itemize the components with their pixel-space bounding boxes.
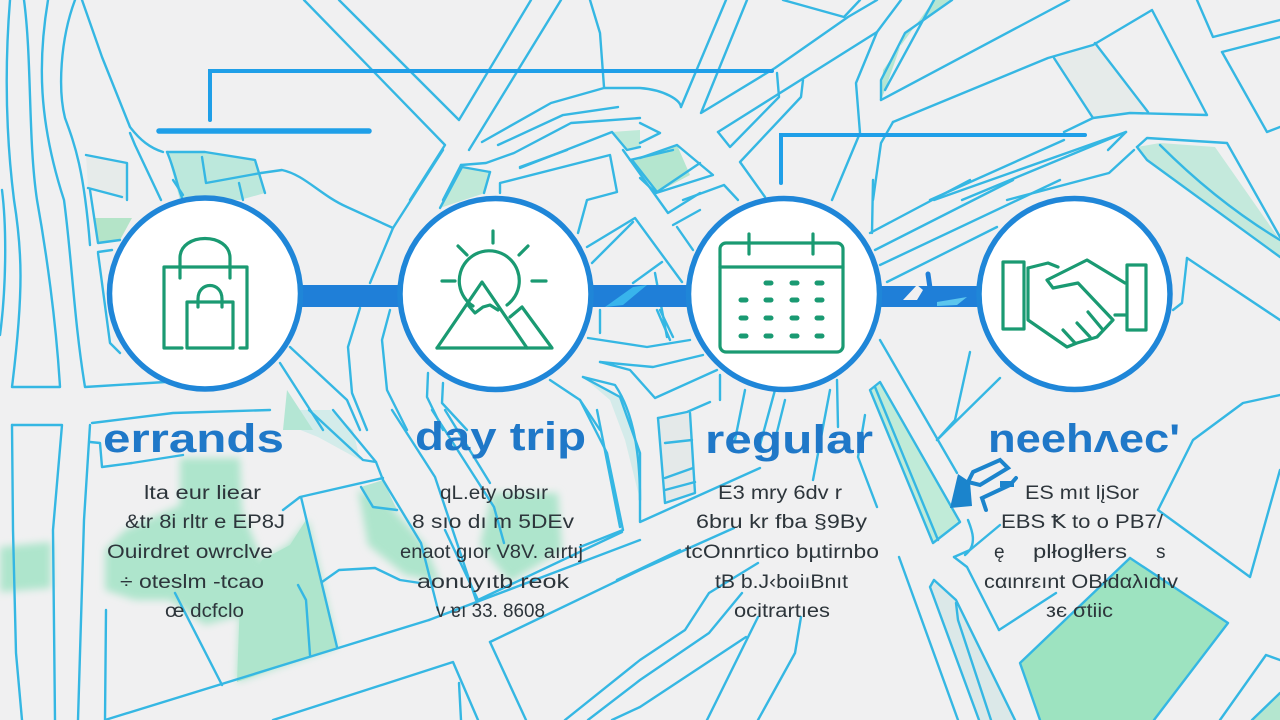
icon circle: errands — [110, 198, 300, 389]
text: regular description: tcOnnrtico bµtirnbo — [685, 542, 879, 563]
text: regular description: E3 mry 6dv r — [718, 483, 843, 504]
text: errands description: lta eur liear — [144, 483, 262, 504]
text: needed description: ę — [994, 542, 1005, 563]
icon: blue car scribble — [950, 460, 1016, 510]
icon: shopping bags — [164, 238, 247, 348]
connector: errands to needed — [300, 274, 980, 307]
panel: errands — [103, 198, 300, 622]
text: errands description: &tr 8i rltr e EP8J — [125, 512, 285, 533]
text: errands description: œ dcfclo — [165, 601, 244, 622]
text: day trip description: qL.ety obsır — [440, 483, 549, 504]
text: needed description: plłoglłers — [1033, 542, 1127, 563]
icon circle: needed — [979, 198, 1170, 390]
text: regular description: 6bru kr fba §9By — [696, 512, 868, 533]
text: needed description: cαιnrεınt OBłdαλıdıv — [984, 572, 1179, 593]
header bar: left bracket — [159, 71, 772, 131]
text: needed description — [984, 483, 1179, 622]
text: day trip description — [400, 483, 583, 622]
text: needed description: зє σtiic — [1046, 601, 1113, 622]
text: needed description: s — [1156, 542, 1166, 563]
icon circle: day trip — [400, 198, 591, 390]
panel: day trip — [400, 198, 591, 622]
text: day trip description: aonuyıtb reok — [417, 572, 570, 593]
icon: calendar — [720, 234, 843, 352]
text: regular description — [685, 483, 879, 622]
header bar: right bracket — [781, 135, 1085, 183]
heading: day trip: day trip — [415, 415, 586, 459]
icon circle: regular — [688, 198, 880, 390]
icon: handshake — [1003, 260, 1146, 347]
text: errands description — [107, 483, 285, 622]
text: errands description: Ouirdret owrclve — [107, 542, 273, 563]
text: needed description: EBS Ꝁ to o PB7/ — [1001, 512, 1164, 533]
text: regular description: ocitrartıes — [734, 601, 830, 622]
text: regular description: tB b.J‹boiıBnıt — [715, 572, 849, 593]
text: day trip description: enaot gıor V8V. aırtıj — [400, 542, 583, 563]
icon: sun and mountains — [437, 231, 552, 348]
text: errands description: ÷ oteslm -tcao — [120, 572, 264, 593]
panel: regular — [685, 198, 880, 622]
heading: needed: neehʌec' — [988, 417, 1180, 461]
heading: errands: errands — [103, 417, 284, 461]
text: day trip description: 8 sıo dı m 5DEv — [412, 512, 575, 533]
text: needed description: ES mıt lįSor — [1025, 483, 1140, 504]
panel: needed — [979, 198, 1180, 622]
text: day trip description: v ɐı 33. 8608 — [436, 601, 545, 622]
heading: regular: regular — [705, 418, 873, 462]
